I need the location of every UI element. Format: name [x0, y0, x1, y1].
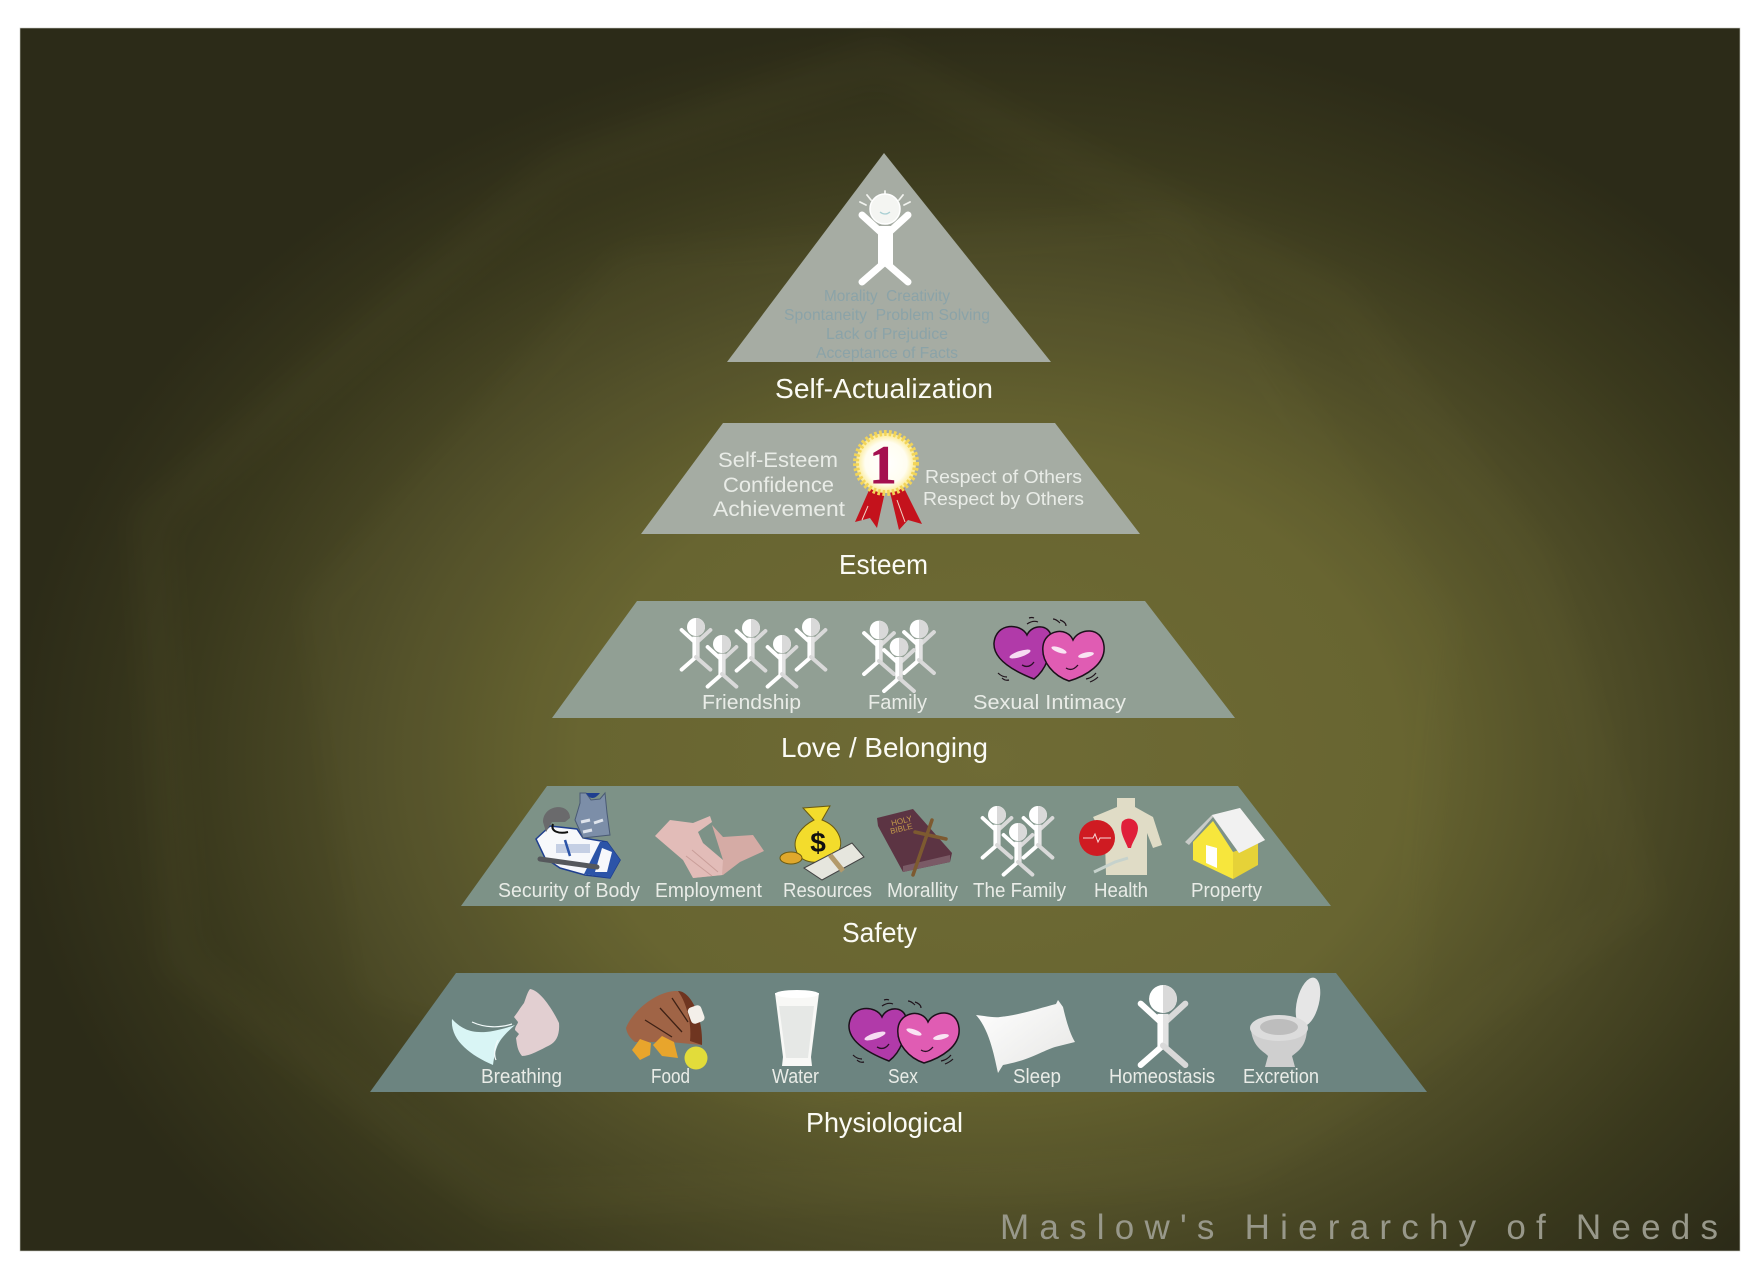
esteem left text: Self-Esteem	[718, 449, 838, 472]
esteem left text	[713, 449, 845, 521]
heading: self-actualization: Self-Actualization	[775, 373, 993, 404]
icon: hearts	[994, 618, 1104, 682]
label: family: Family	[868, 692, 927, 714]
self-actualization needs text: Lack of Prejudice	[826, 326, 948, 343]
esteem trapezoid	[641, 423, 1140, 534]
esteem right text	[923, 467, 1084, 509]
icon: hearts	[849, 1000, 959, 1064]
label: property: Property	[1191, 880, 1262, 902]
label: homeostasis: Homeostasis	[1109, 1066, 1215, 1088]
label: security of body: Security of Body	[498, 880, 640, 902]
icon: handshake	[655, 816, 764, 878]
icon: enlightened stick figure	[860, 191, 910, 282]
icon: breathing face	[452, 989, 559, 1065]
icon: body armor	[536, 793, 620, 878]
self-actualization needs text: Acceptance of Facts	[816, 345, 958, 362]
icon: friendship figures	[682, 618, 825, 687]
esteem right text: Respect of Others	[925, 467, 1082, 487]
label: employment: Employment	[655, 880, 762, 902]
icon: bible and cross: BIBLE	[889, 822, 913, 836]
label: water: Water	[772, 1066, 819, 1088]
esteem right text: Respect by Others	[923, 489, 1084, 509]
tier: self-actualization	[727, 153, 1051, 362]
icon: health torso	[1079, 798, 1162, 875]
icon: family figures	[983, 806, 1052, 875]
heading: safety: Safety	[842, 917, 917, 948]
label: resources: Resources	[783, 880, 872, 902]
icon: money bag and cash: $	[810, 827, 826, 858]
esteem left text: Confidence	[723, 474, 834, 497]
icon: toilet	[1250, 975, 1325, 1067]
physiological trapezoid	[370, 973, 1427, 1092]
tier: esteem	[641, 423, 1140, 534]
self-actualization needs text	[784, 288, 990, 362]
icon: first place medal: 1	[870, 435, 896, 495]
icon: first place medal	[855, 433, 922, 530]
safety trapezoid	[461, 786, 1331, 906]
self-actualization needs text: Morality Creativity	[824, 288, 950, 305]
heading: esteem: Esteem	[839, 549, 928, 580]
label: food: Food	[651, 1066, 690, 1088]
icon: family figures	[864, 620, 934, 691]
love trapezoid	[552, 601, 1235, 718]
title: maslow's hierarchy of needs: Maslow's Hierarchy of Needs	[1000, 1208, 1718, 1247]
label: sex: Sex	[888, 1066, 918, 1088]
label: health: Health	[1094, 880, 1148, 902]
self-actualization triangle	[727, 153, 1051, 362]
tier: love and belonging	[552, 601, 1235, 718]
tier: safety	[461, 786, 1331, 906]
esteem left text: Achievement	[713, 498, 845, 521]
label: morallity: Morallity	[887, 880, 958, 902]
self-actualization needs text: Spontaneity Problem Solving	[784, 307, 990, 324]
tier: physiological	[370, 973, 1427, 1092]
label: sexual intimacy: Sexual Intimacy	[973, 692, 1126, 714]
icon: ham and lemon	[626, 991, 708, 1070]
icon: pillow	[976, 1000, 1075, 1073]
label: breathing: Breathing	[481, 1066, 562, 1088]
icon: bible and cross	[877, 809, 952, 875]
label: excretion: Excretion	[1243, 1066, 1319, 1088]
label: the family: The Family	[973, 880, 1066, 902]
icon: money bag and cash	[780, 806, 864, 880]
heading: love and belonging: Love / Belonging	[781, 732, 988, 763]
icon: glass of water	[775, 990, 819, 1066]
icon: stick figure	[1141, 985, 1185, 1065]
label: friendship: Friendship	[702, 692, 801, 714]
heading: physiological: Physiological	[806, 1107, 963, 1138]
icon: house	[1185, 808, 1265, 879]
icon: bible and cross: HOLY	[890, 814, 914, 828]
label: sleep: Sleep	[1013, 1066, 1061, 1088]
